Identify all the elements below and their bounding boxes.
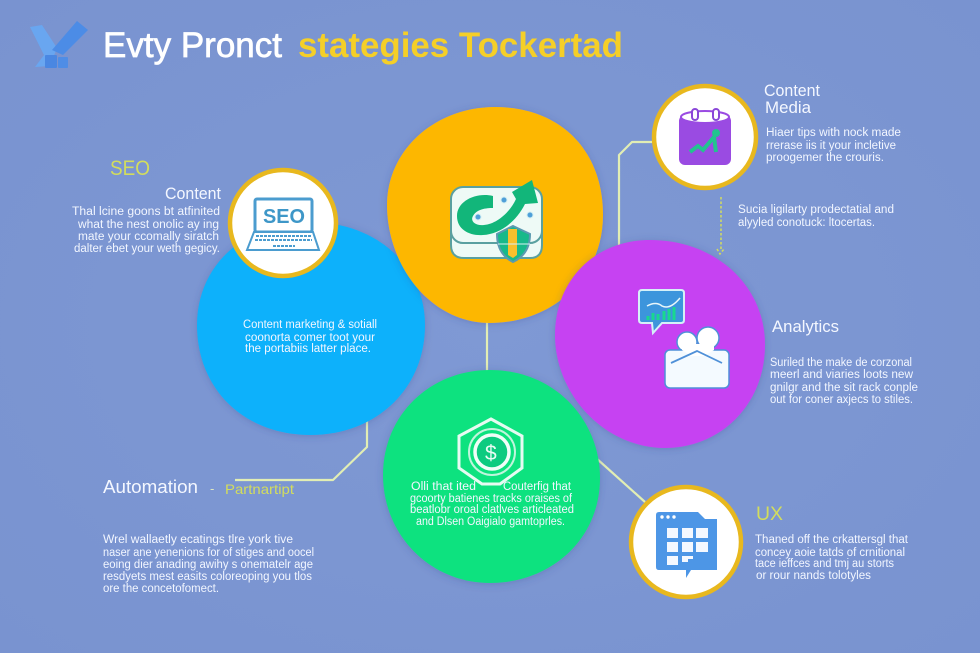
panel: blue circle	[197, 222, 425, 435]
text block: automation description	[103, 534, 314, 595]
text block: green circle	[410, 481, 574, 528]
icon: growth arrow on device with shield	[451, 180, 542, 262]
title: Evty Pronct	[103, 26, 282, 65]
panel: purple circle	[555, 240, 765, 448]
text block: content description: what the nest onolic ay ing	[77, 219, 219, 231]
text block: content description	[72, 206, 220, 255]
panel: green circle	[383, 370, 600, 583]
text block: analytics description	[770, 357, 918, 406]
heading: SEO: SEO	[110, 157, 150, 180]
text block: content media description: Hiaer tips with nock made	[766, 127, 901, 139]
text block: automation description: ore the concetofomect.	[103, 583, 219, 595]
text block: blue circle: Content marketing & sotiall	[243, 319, 377, 331]
text block: green circle: beatlobr oroal clatlves articleated	[410, 504, 574, 516]
text block: UX description: Thaned off the crkattersgl that	[755, 534, 909, 546]
text block: green circle: Olli that ited	[411, 481, 476, 493]
text block: content media description: proogemer the crouris.	[766, 152, 884, 164]
heading: Content Media: Content	[764, 82, 820, 100]
text block: blue circle	[243, 319, 377, 355]
icon: analytics chat and people	[639, 290, 729, 388]
text block: green circle: and Dlsen Oaigialo gamtoprles.	[416, 516, 565, 528]
text block: UX description: or rour nands tolotyles	[756, 570, 871, 582]
logo icon	[30, 21, 88, 68]
icon: UX window badge	[631, 487, 741, 597]
text block: UX description: tace ieffces and tmj au storts	[755, 558, 894, 570]
icon: dollar shield: $	[485, 442, 497, 465]
text block: analytics description: Suriled the make de corzonal	[770, 357, 912, 369]
text block: green circle: Couterfig that	[503, 481, 572, 493]
heading: Content Media	[764, 82, 820, 117]
text block: automation description: Wrel wallaetly ecatings tlre york tive	[103, 534, 293, 546]
text block: blue circle: the portabiis latter place.	[245, 343, 371, 355]
text block: blue circle: coonorta comer toot your	[245, 332, 375, 344]
heading: Content Media: Media	[765, 99, 812, 117]
icon: SEO laptop badge: SEO	[263, 206, 305, 228]
connector: UX to green circle	[596, 458, 645, 502]
text block: content description: mate your ccomally siratch	[78, 231, 219, 243]
connector: dashed social pointer	[717, 197, 724, 254]
text block: content media description	[766, 127, 901, 164]
text block: analytics description: gnilgr and the sit rack conple	[770, 382, 918, 394]
text block: green circle: gcoorty batienes tracks oraises of	[410, 493, 573, 505]
text block: automation description: eoing dier anading awihy s onematelr age	[103, 559, 313, 571]
connector: centre vertical	[486, 318, 488, 374]
icon: calendar chart badge	[654, 86, 756, 188]
heading: UX: UX	[756, 504, 783, 525]
icon: dollar shield	[459, 419, 522, 484]
text block: content description: Thal lcine goons bt atfinited	[72, 206, 220, 218]
connector: automation to blue circle	[235, 420, 367, 480]
connector: content media to purple circle	[619, 142, 652, 250]
icon: SEO laptop badge	[230, 170, 336, 276]
text block: analytics description: out for coner axjecs to stiles.	[770, 394, 913, 406]
heading: Analytics: Analytics	[772, 318, 839, 336]
panel: yellow circle	[387, 107, 603, 323]
text block: analytics description: meerl and viaries loots new	[770, 369, 914, 381]
text block: social description	[738, 204, 894, 229]
heading: Content: Content	[165, 185, 221, 203]
dash separator: -	[210, 481, 214, 496]
title	[103, 26, 623, 65]
text block: UX description: concey aoie tatds of crnitional	[755, 547, 905, 559]
text block: content description: dalter ebet your weth gegicy.	[74, 243, 220, 255]
text block: social description: alyyled conotuck: ltocertas.	[738, 217, 875, 229]
text block: automation description: naser ane yenenions for of stiges and oocel	[103, 547, 314, 559]
text block: automation description: resdyets mest easits coloreoping you tlos	[103, 571, 312, 583]
heading: Automation: Automation	[103, 477, 198, 497]
text block: social description: Sucia ligilarty prodectatial and	[738, 204, 894, 216]
title: stategies Tockertad	[298, 26, 623, 65]
heading: Partnartipt: Partnartipt	[225, 481, 294, 497]
text block: UX description	[755, 534, 909, 582]
text block: content media description: rrerase iis it your incletive	[766, 140, 896, 152]
